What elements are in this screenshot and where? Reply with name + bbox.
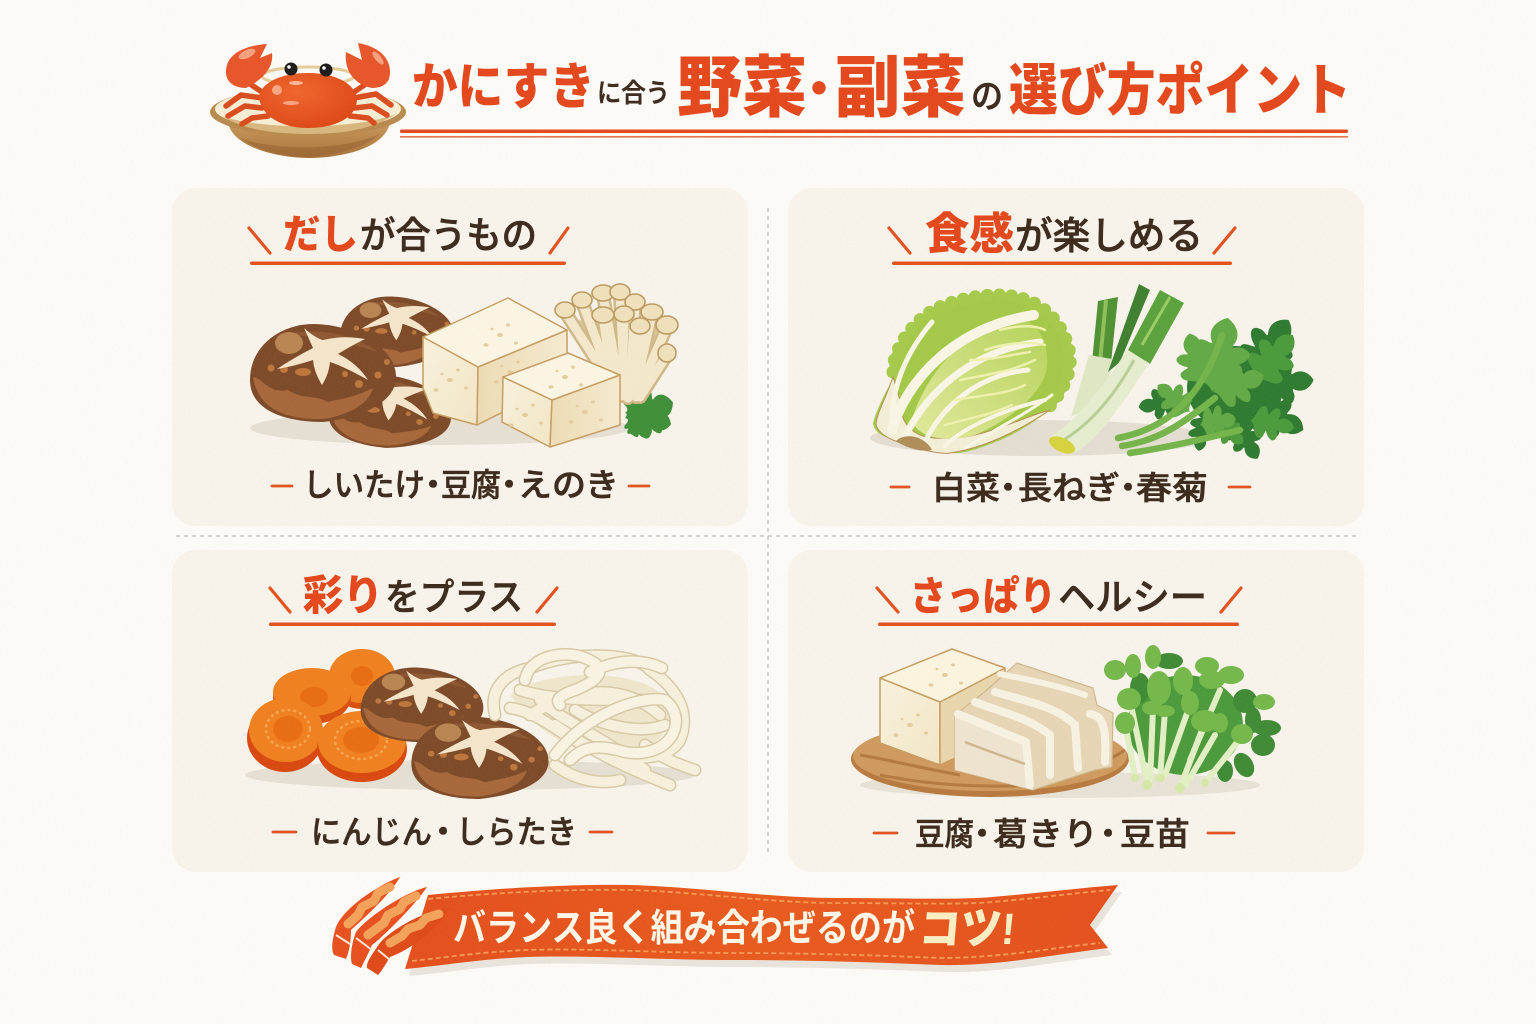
banner text: バランス良く組み合わぜるのが [453, 908, 915, 950]
carrots [247, 649, 407, 782]
shiitake [250, 296, 454, 452]
caption: ・ [427, 814, 459, 850]
icon: crab on plate [210, 43, 406, 158]
caption: 葛きり [993, 816, 1098, 852]
caption: ・ [493, 467, 525, 503]
title underline [400, 130, 1348, 138]
shiitake [361, 668, 549, 799]
banner text: コツ! [917, 905, 1017, 954]
caption: 豆腐 [441, 467, 501, 503]
panel: さっぱりヘルシー [788, 550, 1364, 872]
heading [889, 210, 1235, 265]
title: 野菜 [677, 51, 807, 126]
caption: 春菊 [1136, 470, 1208, 506]
title [412, 51, 1351, 126]
heading [269, 572, 557, 626]
illustration: shiitake, tofu, enoki [250, 284, 681, 452]
heading: さっぱり [910, 575, 1056, 619]
panel: 食感が楽しめる [788, 188, 1364, 526]
kuzukiri [955, 663, 1113, 790]
caption: しいたけ [303, 467, 425, 503]
shirataki noodles [494, 654, 695, 785]
pea sprouts [1104, 645, 1281, 793]
caption: 長ねぎ [1018, 470, 1120, 506]
caption: ・ [992, 470, 1024, 506]
tofu large [423, 298, 567, 425]
heading: をプラス [385, 577, 523, 618]
caption: 豆腐 [915, 816, 974, 852]
heading: ヘルシー [1058, 577, 1207, 618]
shungiku [1118, 306, 1315, 467]
caption: えのき [518, 467, 619, 503]
heading: 彩り [303, 572, 383, 619]
leek [1046, 284, 1184, 457]
caption: ・ [1112, 470, 1144, 506]
caption [272, 467, 649, 503]
title: ・ [795, 64, 843, 117]
wooden board [851, 721, 1129, 797]
caption [273, 814, 612, 850]
panel: だしが合うもの [172, 188, 748, 526]
illustration: tofu, kuzukiri, pea sprouts [851, 645, 1281, 798]
caption: にんじん [311, 814, 432, 850]
tofu block [880, 649, 1005, 765]
enoki mushrooms [555, 284, 678, 402]
caption: しらたき [456, 814, 577, 850]
title: かにすき [412, 59, 595, 115]
panel: 彩りをプラス [172, 550, 748, 872]
dashed dividers [176, 208, 1360, 852]
title: の [971, 78, 1003, 116]
heading: が合うもの [360, 215, 537, 256]
heading: だし [283, 213, 358, 257]
caption [874, 816, 1234, 852]
title: 選び方ポイント [1009, 59, 1351, 122]
tofu small [502, 353, 620, 447]
heading [877, 575, 1241, 626]
illustration: napa cabbage, leek, shungiku [870, 284, 1315, 467]
parsley garnish [616, 371, 681, 444]
caption: 白菜 [932, 470, 1000, 506]
icon: crab legs [332, 877, 449, 975]
caption: ・ [417, 467, 449, 503]
heading: 食感 [925, 210, 1014, 259]
ribbon banner [405, 885, 1122, 976]
napa cabbage [873, 294, 1074, 453]
heading [249, 213, 568, 265]
caption [891, 470, 1250, 506]
title: 副菜 [835, 51, 966, 126]
caption: ・ [1092, 816, 1124, 852]
caption: ・ [966, 816, 998, 852]
illustration: carrot, shiitake, shirataki [245, 649, 695, 799]
title: に合う [597, 78, 670, 108]
heading: が楽しめる [1015, 216, 1203, 258]
caption: 豆苗 [1120, 816, 1190, 852]
